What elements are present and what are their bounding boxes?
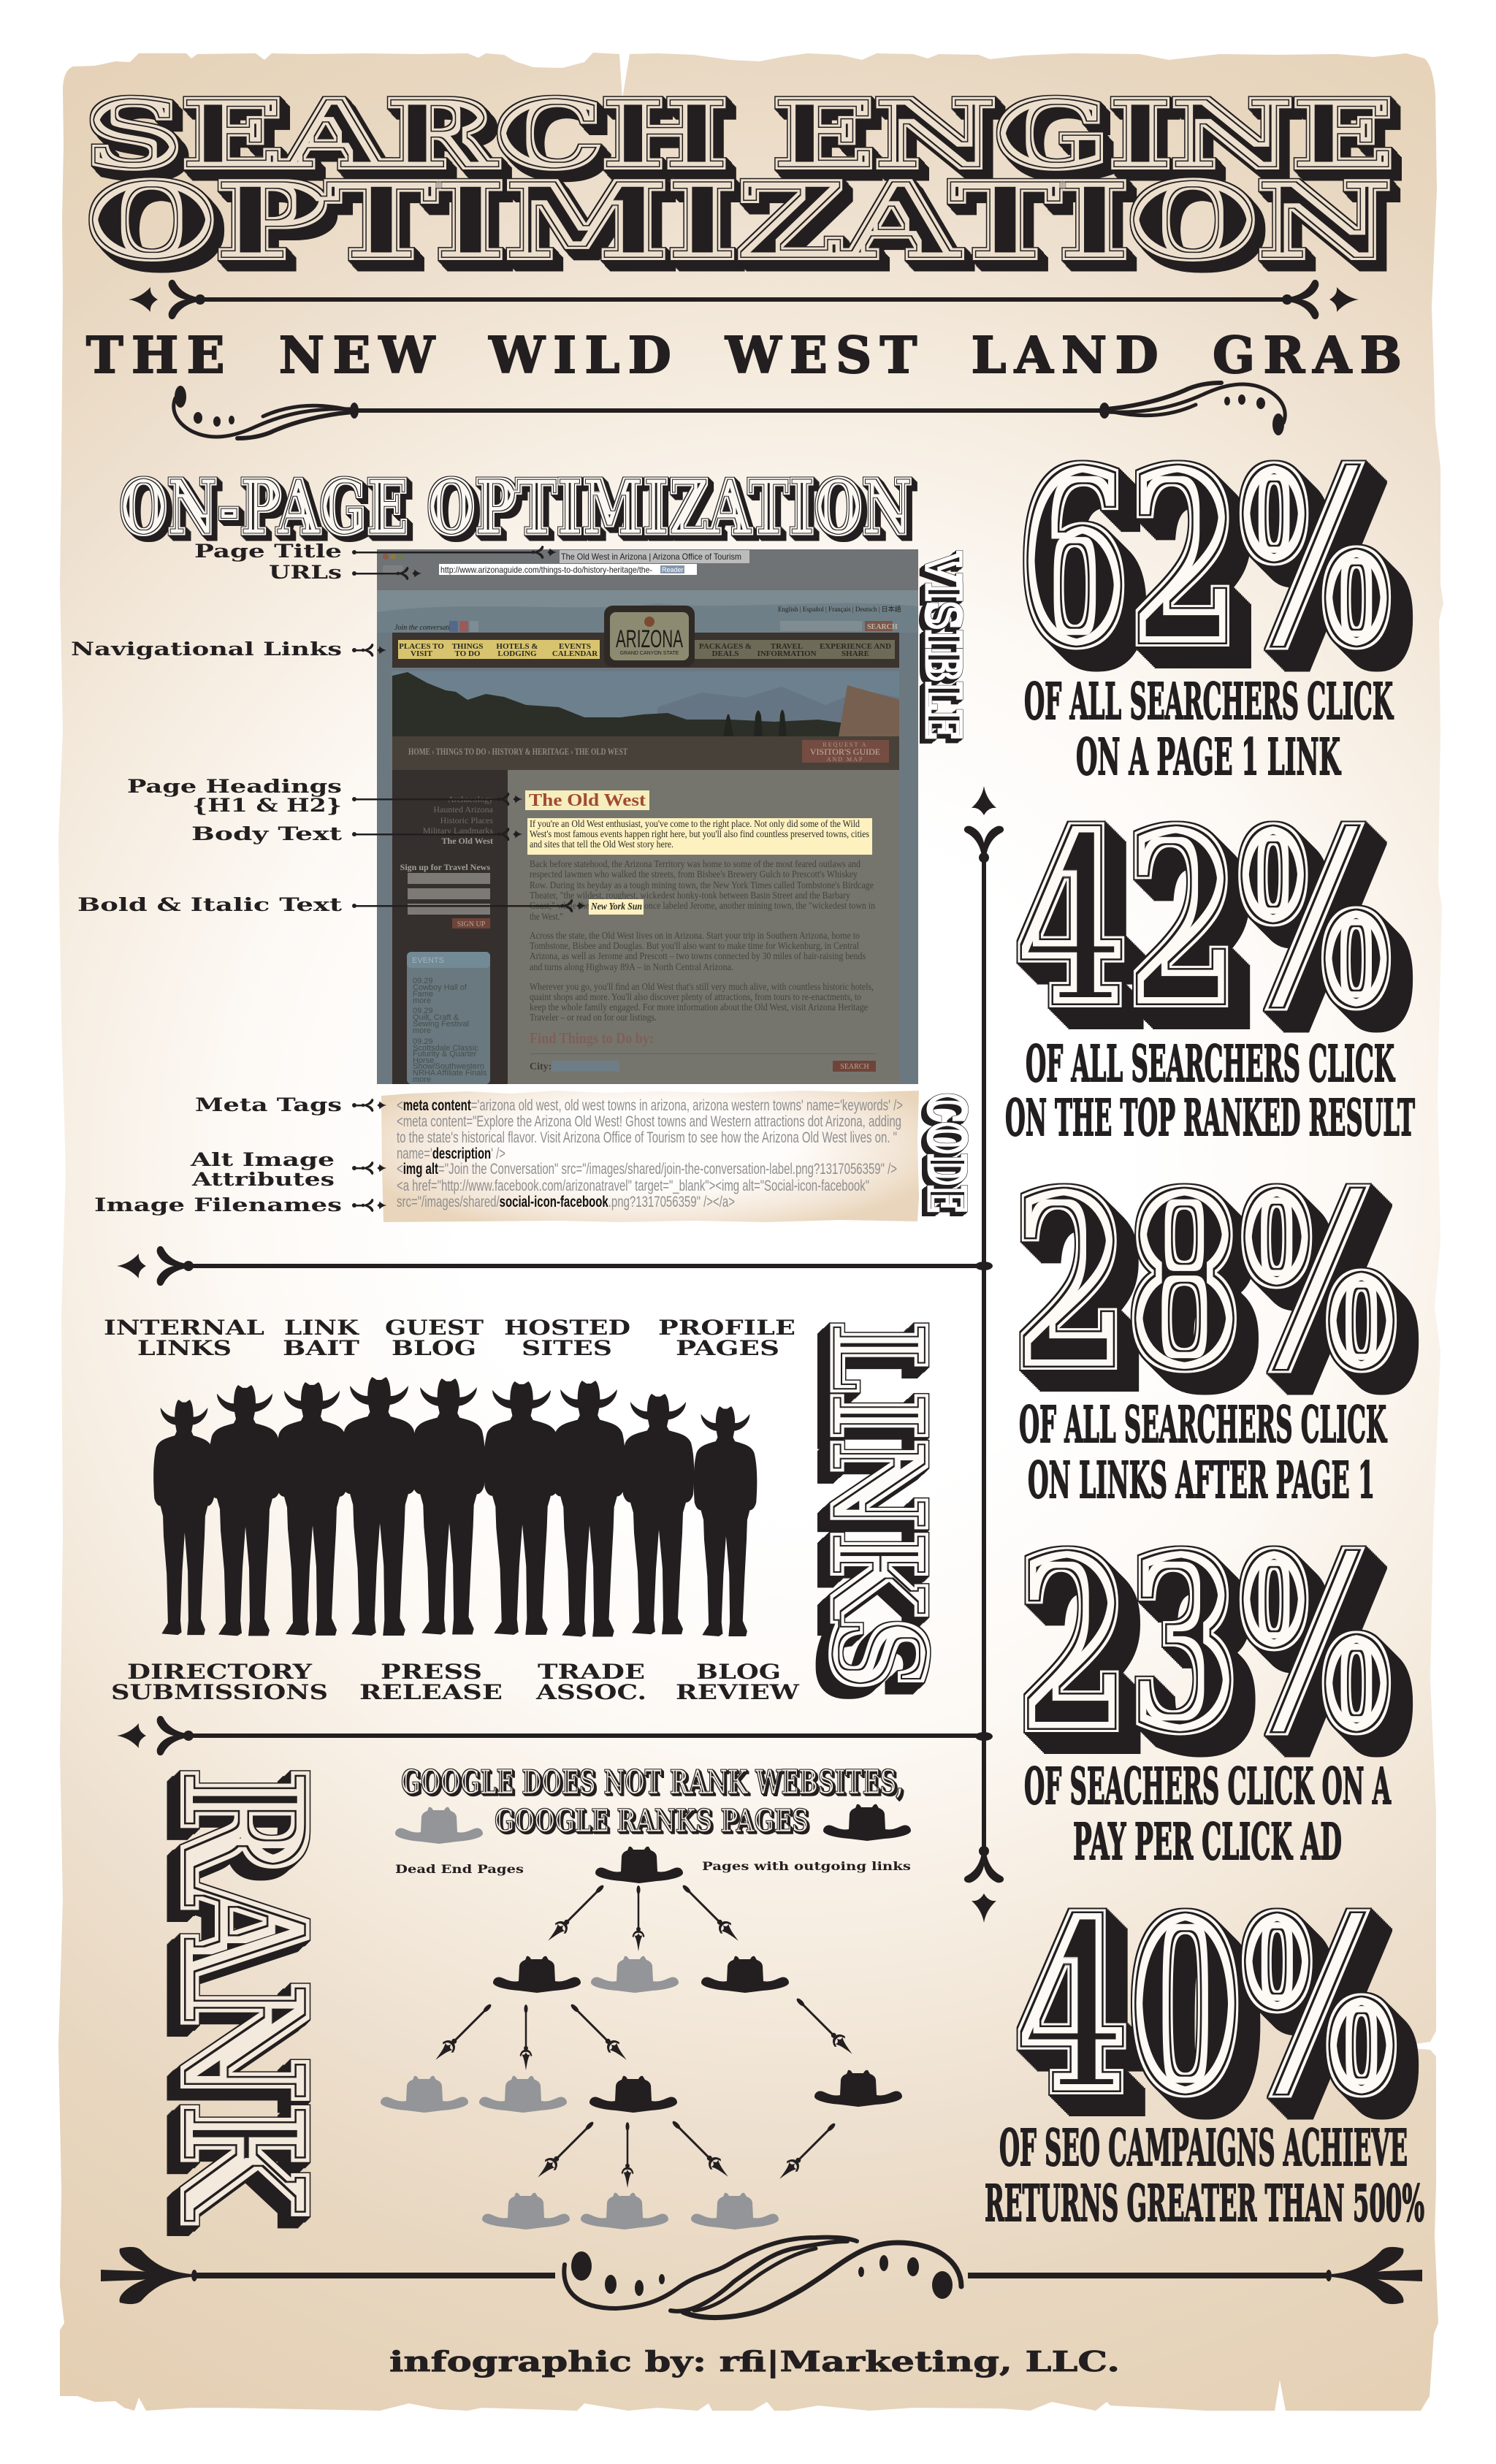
- article paragraphs: Traveler – or read on for our listings.: [530, 1012, 657, 1023]
- panel: source code: <img alt="Join the Conversation" src="/images/shared/join-the-conversation-label.png?1317056359" />: [397, 1161, 897, 1178]
- link types: top row: LINK: [284, 1316, 360, 1340]
- vertical label: code: CODE: [917, 1094, 975, 1213]
- main title: SEARCH ENGINE: [86, 82, 1394, 188]
- callout labels and connectors: Navigational Links: [71, 638, 342, 660]
- navigation bar: TRAVEL: [771, 642, 803, 651]
- link types: top row: INTERNAL: [104, 1316, 264, 1340]
- navigation bar: VISIT: [411, 649, 433, 658]
- link types: top row: BAIT: [283, 1336, 359, 1360]
- ornament: bottom flourish: [101, 2238, 1422, 2318]
- article paragraphs: Tombstone, Bisbee and Douglas. But you'll also want to make time for Wickenburg, in Central: [530, 941, 859, 952]
- find things form: SEARCH: [840, 1063, 869, 1071]
- link types: bottom row: [111, 1660, 800, 1704]
- link types: top row: LINKS: [137, 1336, 232, 1360]
- link types: bottom row: DIRECTORY: [127, 1660, 313, 1684]
- new york sun highlight: [589, 899, 644, 915]
- sidebar: more: [413, 1026, 431, 1035]
- breadcrumb band: REQUEST A: [823, 741, 868, 748]
- browser url highlight: Reader: [662, 566, 684, 573]
- navigation bar: THINGS: [452, 642, 483, 651]
- sidebar: Sign up for Travel News: [400, 862, 490, 872]
- breadcrumb band: HOME › THINGS TO DO › HISTORY & HERITAGE › THE OLD WEST: [408, 746, 627, 757]
- hat tree diagram: [381, 1804, 911, 2230]
- sidebar: EVENTS: [412, 956, 444, 965]
- ornament: section rules and vertical divider: [117, 786, 1004, 1923]
- sidebar: 09.29: [413, 1037, 433, 1046]
- navigation bar: EXPERIENCE AND: [820, 642, 891, 651]
- vertical label: visible: VISIBLE: [915, 552, 970, 739]
- navigation bar: HOTELS &: [496, 642, 538, 651]
- sidebar: Horse: [413, 1056, 434, 1065]
- subtitle: THE NEW WILD WEST LAND GRAB: [86, 327, 1402, 385]
- link types: bottom row: TRADE: [538, 1660, 645, 1684]
- link types: top row: PROFILE: [658, 1316, 795, 1340]
- heading: on-page optimization: ON-PAGE OPTIMIZATION: [120, 464, 912, 551]
- article paragraphs: Wherever you go, you'll find an Old West that's still very much alive, with countless historic hotels,: [530, 982, 874, 993]
- navigation bar: PLACES TO: [399, 642, 444, 651]
- legend: pages with outgoing links: Pages with outgoing links: [702, 1859, 911, 1873]
- ornament: title divider: [129, 280, 1359, 319]
- arizona logo: ARIZONA: [616, 625, 683, 653]
- link types: top row: [104, 1316, 795, 1360]
- article paragraphs: Arizona, as well as Jerome and Prescott – two towns connected by 30 miles of hair-raising bends: [530, 951, 866, 962]
- article paragraphs: and turns along Highway 89A – in North Central Arizona.: [530, 962, 733, 973]
- arizona logo: GRAND CANYON STATE: [620, 651, 679, 656]
- article paragraphs: respected lawmen who walked the streets, from Bisbee's Brewery Gulch to Prescott's Whiskey: [530, 869, 858, 880]
- link types: top row: HOSTED: [504, 1316, 630, 1340]
- link types: top row: PAGES: [676, 1336, 779, 1360]
- article paragraphs: Across the state, the Old West lives on in Arizona. Start your trip in Southern Arizona, home to: [530, 931, 860, 942]
- gray hats: [381, 1807, 779, 2230]
- callout labels and connectors: {H1 & H2}: [192, 795, 342, 816]
- article paragraphs: [530, 859, 875, 1023]
- browser page title highlight: The Old West in Arizona | Arizona Office of Tourism: [561, 552, 741, 562]
- navigation bar: INFORMATION: [757, 649, 817, 658]
- navigation bar: [392, 633, 899, 668]
- sidebar: SIGN UP: [457, 920, 486, 928]
- article paragraphs: Coast," while the New York Sun once labeled Jerome, another mining town, the "wickedest town in: [530, 901, 875, 912]
- credit line: infographic by: rfi|Marketing, LLC.: [389, 2345, 1120, 2378]
- cowboy silhouettes: [153, 1377, 757, 1636]
- link types: bottom row: BLOG: [696, 1660, 781, 1684]
- article paragraphs: quaint shops and more. You'll also discover plenty of attractions, from tours to re-enactments, to: [530, 992, 861, 1003]
- navigation bar: SHARE: [842, 649, 869, 658]
- heading highlight: The Old West: [529, 791, 646, 810]
- body text highlight: and sites that tell the Old West story here.: [530, 839, 673, 850]
- callout labels and connectors: Image Filenames: [94, 1194, 342, 1216]
- legend: dead end pages: Dead End Pages: [395, 1862, 524, 1876]
- panel: source code: to the state's historical flavor. Visit Arizona Office of Tourism to see how the Arizona Old West lives on. ": [397, 1129, 897, 1146]
- body text highlight: If you're an Old West enthusiast, you've come to the right place. Not only did some of the Wild: [530, 819, 860, 830]
- breadcrumb band: VISITOR'S GUIDE: [810, 747, 880, 757]
- new york sun highlight: New York Sun: [590, 901, 642, 912]
- site header: SEARCH: [867, 623, 898, 631]
- sidebar: more: [413, 996, 431, 1005]
- find things form: Find Things to Do by:: [530, 1029, 654, 1047]
- link types: top row: BLOG: [392, 1336, 476, 1360]
- sidebar: Fame: [413, 990, 433, 999]
- article paragraphs: the West.": [530, 912, 563, 923]
- link types: bottom row: ASSOC.: [535, 1680, 646, 1704]
- vertical label: links: LINKS: [804, 1321, 952, 1690]
- navigation bar: EVENTS: [559, 642, 591, 651]
- callout labels and connectors: URLs: [269, 562, 342, 583]
- stat: 40 percent: [985, 1870, 1424, 2233]
- callout labels and connectors: Page Title: [194, 541, 342, 562]
- sidebar: 09.29: [413, 977, 433, 985]
- sidebar: Quilt, Craft &: [413, 1013, 459, 1022]
- stat: 23 percent: [1018, 1508, 1392, 1872]
- site header: [377, 590, 918, 633]
- sidebar: The Old West: [442, 836, 493, 846]
- article paragraphs: Theater, "the wildest, roughest, wickedest honky-tonk between Basin Street and the Barbary: [530, 890, 850, 901]
- sidebar: [392, 770, 508, 1084]
- link types: top row: GUEST: [385, 1316, 484, 1340]
- body text highlight: West's most famous events happen right here, but you'll also find countless preserved towns, cities: [530, 829, 869, 840]
- stat: 42 percent: [1005, 783, 1415, 1148]
- breadcrumb band: AND MAP: [827, 756, 863, 763]
- sidebar: Show/Southwestern: [413, 1062, 484, 1071]
- callout labels and connectors: Bold & Italic Text: [77, 894, 343, 915]
- callout labels and connectors: Alt Image: [190, 1149, 335, 1170]
- link types: bottom row: SUBMISSIONS: [111, 1680, 328, 1704]
- find things form: [530, 1029, 877, 1072]
- landscape banner: [392, 671, 899, 736]
- arrows: [430, 1880, 858, 2188]
- main title: [86, 82, 1394, 282]
- sidebar: Cowboy Hall of: [413, 983, 468, 992]
- callout labels and connectors: Meta Tags: [195, 1094, 342, 1115]
- panel: source code: <meta content='arizona old west, old west towns in arizona, arizona western towns' name='keywords' />: [397, 1097, 903, 1114]
- find things form: City:: [530, 1061, 552, 1072]
- black hats: [493, 1804, 911, 2113]
- link types: bottom row: PRESS: [381, 1660, 482, 1684]
- heading: google ranks pages: [401, 1763, 904, 1839]
- vertical label: rank: RANK: [145, 1769, 339, 2222]
- navigation bar: DEALS: [712, 649, 739, 658]
- panel: source code: [381, 1091, 919, 1222]
- link types: bottom row: REVIEW: [676, 1680, 800, 1704]
- arizona logo: [604, 606, 695, 667]
- article paragraphs: Back before statehood, the Arizona Territory was home to some of the most feared outlaws and: [530, 859, 860, 870]
- panel: source code: name='description' />: [397, 1145, 505, 1162]
- panel: source code: <meta content="Explore the Arizona Old West! Ghost towns and Western attractions dot Arizona, adding: [397, 1113, 901, 1130]
- callout labels and connectors: Attributes: [191, 1169, 335, 1190]
- link types: bottom row: RELEASE: [359, 1680, 503, 1704]
- stat: 28 percent: [1014, 1145, 1397, 1510]
- navigation bar: LODGING: [497, 649, 537, 658]
- callout labels and connectors: Page Headings: [127, 776, 342, 797]
- panel: source code: src="/images/shared/social-icon-facebook.png?1317056359" /></a>: [397, 1194, 735, 1210]
- site header: Join the conversation: [394, 624, 457, 632]
- sidebar: 09.29: [413, 1007, 433, 1015]
- article paragraphs: Row. During its heyday as a tough mining town, the New York Times called Tombstone's Birdcage: [530, 880, 874, 891]
- sidebar: NRHA Affiliate Finals: [413, 1069, 487, 1077]
- browser url highlight: http://www.arizonaguide.com/things-to-do/history-heritage/the-: [440, 565, 652, 575]
- article paragraphs: keep the whole family engaged. For more information about the Old West, visit Arizona Heritage: [530, 1002, 868, 1013]
- stat: 62 percent: [1018, 422, 1394, 787]
- site header: English | Español | Français | Deutsch | 日本語: [778, 605, 901, 613]
- navigation bar: TO DO: [455, 649, 481, 658]
- navigation bar: CALENDAR: [552, 649, 598, 658]
- sidebar: Futurity & Quarter: [413, 1050, 477, 1059]
- sidebar: Historic Places: [440, 815, 493, 825]
- body text highlight: [527, 818, 872, 855]
- flourish under subtitle: [174, 383, 1285, 438]
- panel: source code: <a href="http://www.facebook.com/arizonatravel" target="_blank"><img alt="Social-icon-facebook": [397, 1178, 869, 1194]
- sidebar: Sewing Festival: [413, 1020, 469, 1029]
- main title: OPTIMIZATION: [88, 161, 1392, 282]
- callout labels and connectors: Body Text: [191, 823, 343, 844]
- browser chrome: [377, 549, 918, 590]
- heading: google ranks pages: GOOGLE DOES NOT RANK WEBSITES,: [401, 1763, 904, 1801]
- sidebar: Military Landmarks: [423, 825, 493, 836]
- sidebar: Haunted Arizona: [433, 804, 494, 815]
- sidebar: Scottsdale Classic: [413, 1044, 478, 1053]
- article content: [508, 770, 899, 1084]
- breadcrumb band: [392, 736, 899, 770]
- heading: google ranks pages: GOOGLE RANKS PAGES: [495, 1803, 809, 1839]
- navigation bar: PACKAGES &: [699, 642, 752, 651]
- link types: top row: SITES: [522, 1336, 612, 1360]
- panel: annotated website screenshot: [377, 549, 918, 1084]
- callout labels and connectors: [71, 541, 586, 1216]
- sidebar: Archaeology: [448, 794, 493, 804]
- sidebar: more: [413, 1075, 431, 1084]
